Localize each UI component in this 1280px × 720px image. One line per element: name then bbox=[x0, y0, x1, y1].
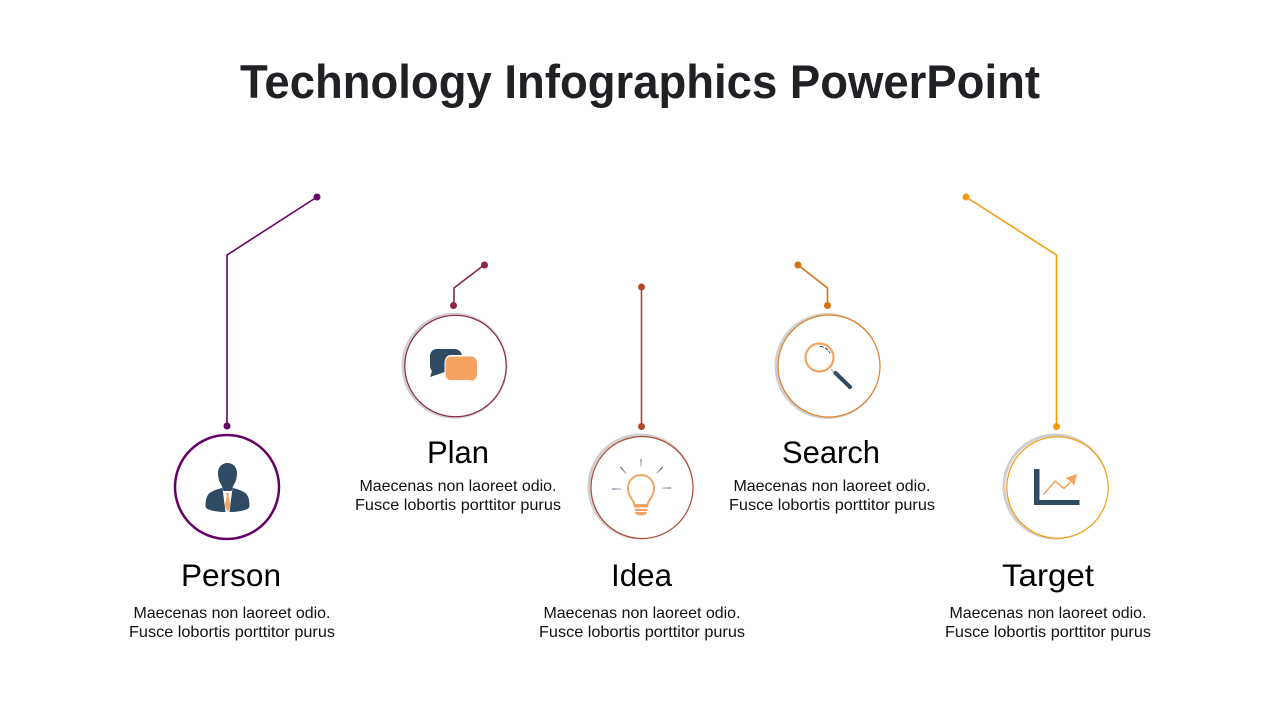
connector: plan bbox=[450, 262, 488, 309]
description: person: Fusce lobortis porttitor purus bbox=[129, 624, 335, 641]
panel: search bbox=[729, 262, 935, 514]
description: search bbox=[729, 478, 935, 514]
description: person bbox=[129, 605, 335, 641]
icon: speech bubbles bbox=[430, 349, 479, 382]
connector: target bbox=[962, 194, 1060, 430]
description: target bbox=[945, 605, 1151, 641]
ring: search bbox=[776, 314, 880, 418]
panel: idea bbox=[539, 284, 745, 641]
description: plan: Maecenas non laoreet odio. bbox=[360, 478, 556, 495]
ring: person bbox=[175, 435, 279, 539]
description: person: Maecenas non laoreet odio. bbox=[134, 605, 330, 622]
icon: growth chart bbox=[1034, 469, 1080, 505]
label: search: Search bbox=[782, 434, 880, 470]
icon: light bulb bbox=[612, 459, 671, 516]
description: idea: Maecenas non laoreet odio. bbox=[544, 605, 740, 622]
description: search: Fusce lobortis porttitor purus bbox=[729, 497, 935, 514]
description: target: Maecenas non laoreet odio. bbox=[950, 605, 1146, 622]
description: plan: Fusce lobortis porttitor purus bbox=[355, 497, 561, 514]
icon: magnifier bbox=[806, 344, 850, 387]
description: plan bbox=[355, 478, 561, 514]
ring: plan bbox=[403, 314, 506, 417]
label: idea: Idea bbox=[611, 557, 672, 593]
label: plan: Plan bbox=[427, 434, 489, 470]
label: person: Person bbox=[181, 557, 281, 593]
description: idea: Fusce lobortis porttitor purus bbox=[539, 624, 745, 641]
panel: plan bbox=[355, 262, 561, 514]
connector: idea bbox=[638, 284, 645, 430]
panel: target bbox=[945, 194, 1151, 641]
ring: target bbox=[1004, 435, 1108, 538]
icon: person bbox=[206, 463, 250, 512]
description: search: Maecenas non laoreet odio. bbox=[734, 478, 930, 495]
label: target: Target bbox=[1002, 557, 1094, 593]
title: Technology Infographics PowerPoint bbox=[240, 55, 1040, 108]
description: target: Fusce lobortis porttitor purus bbox=[945, 624, 1151, 641]
panel: person bbox=[129, 194, 335, 641]
connector: search bbox=[794, 262, 831, 309]
description: idea bbox=[539, 605, 745, 641]
connector: person bbox=[224, 194, 320, 430]
ring: idea bbox=[589, 435, 693, 538]
